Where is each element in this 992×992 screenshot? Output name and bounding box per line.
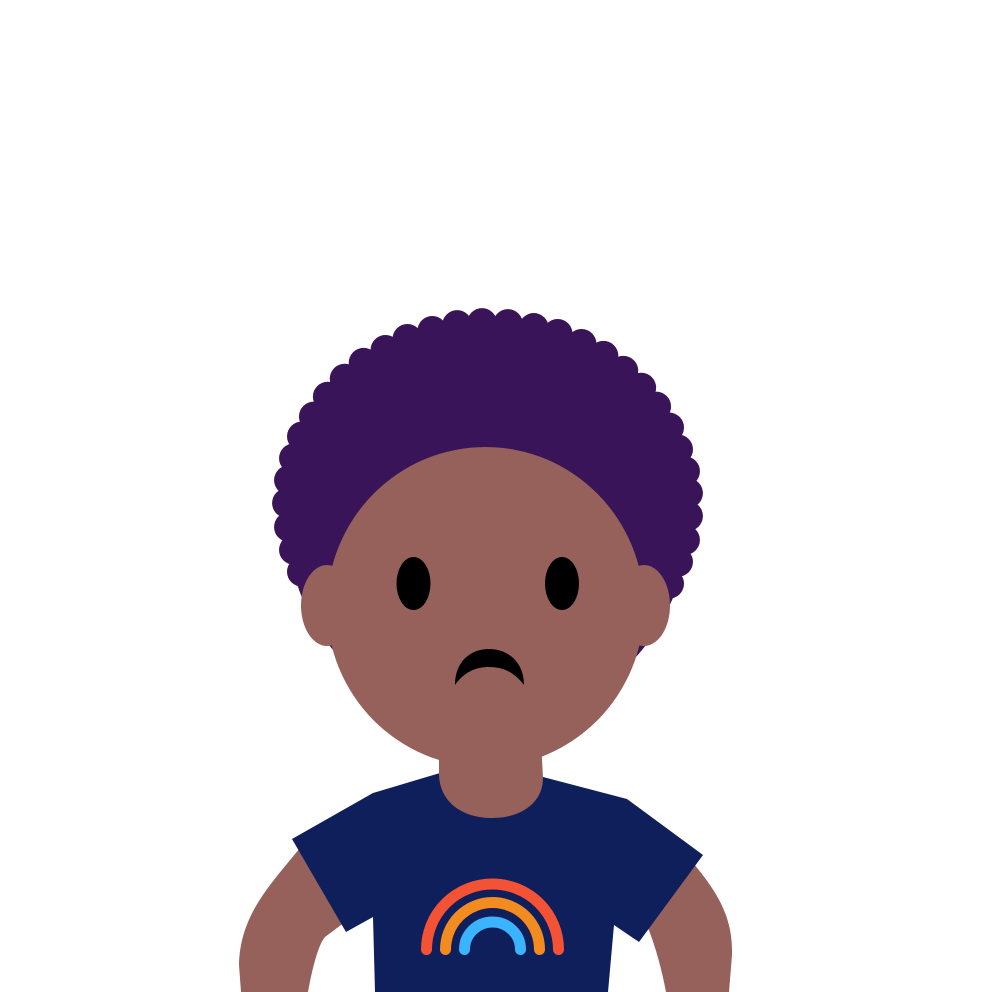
eye: right xyxy=(545,557,579,610)
shirt xyxy=(292,773,703,992)
neck xyxy=(439,740,543,818)
eye: left xyxy=(396,557,430,610)
rainbow arc: blue xyxy=(464,922,520,950)
rainbow arc: orange xyxy=(446,903,540,950)
mouth: frown xyxy=(455,649,524,685)
arm: left xyxy=(239,848,345,992)
icon: rainbow on shirt xyxy=(426,884,558,950)
ear: right xyxy=(618,565,670,646)
arm: right xyxy=(648,863,732,992)
ear: left xyxy=(301,565,353,646)
rainbow arc: red xyxy=(426,884,558,950)
face xyxy=(327,447,644,767)
hair: afro xyxy=(272,308,703,723)
